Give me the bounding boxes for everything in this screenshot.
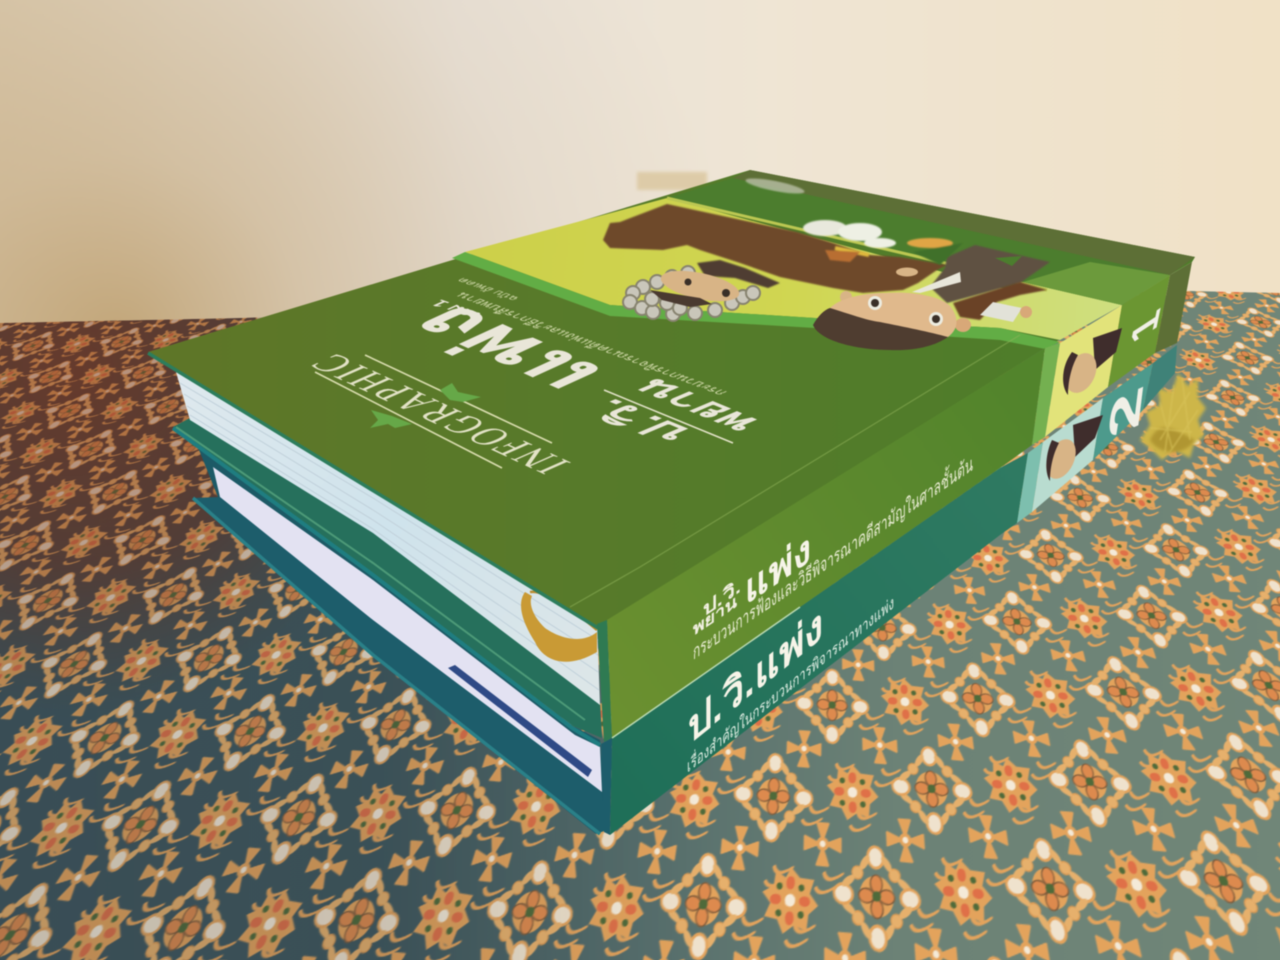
illustration: judge wig <box>623 266 760 321</box>
spine yellow panel <box>1045 305 1122 437</box>
publisher logo <box>745 175 805 197</box>
teal panel <box>1093 363 1153 460</box>
edition label on cover: ฉบับ อัพเดต <box>453 276 523 302</box>
ribbon bookmark <box>521 592 597 662</box>
title: พยาน on cover: พยาน <box>619 374 771 437</box>
cloth lighting overlays <box>0 290 1280 960</box>
cover artwork: light green chevron strip <box>452 252 1060 349</box>
illustration: judge hair <box>697 260 780 288</box>
illustration: lawyer head <box>813 293 971 350</box>
illustration: judge face <box>650 265 742 307</box>
illustration: papers on the bench <box>803 220 963 265</box>
dark teal end <box>1143 345 1177 410</box>
lower book: page block <box>213 467 602 792</box>
spine subtitle: กระบวนการฟ้องและวิธีพิจารณาคดีสามัญในศาลชั้นต้น <box>693 448 973 665</box>
spine number 2: 2 <box>1099 379 1153 446</box>
cover artwork: dark olive edge band <box>733 170 1195 275</box>
spine light green strip <box>1032 343 1060 445</box>
title: ป.วิ. on cover: ป.วิ. <box>576 394 704 447</box>
upper book: page block <box>176 372 600 705</box>
spine character icon <box>1059 328 1122 398</box>
spine title: ป.วิ.: ป.วิ. <box>703 575 741 622</box>
illustration: lawyer body <box>953 282 1047 320</box>
spine dark end panel <box>1155 262 1192 353</box>
spine title: พยาน: พยาน <box>693 591 737 640</box>
cover artwork: yellow band <box>465 198 1122 340</box>
spine character icon <box>1040 415 1103 484</box>
tablecloth floral pattern <box>0 290 1280 960</box>
title: แพ่ง on cover: แพ่ง <box>389 296 624 402</box>
illustration: lawyer robe panel <box>930 245 1050 303</box>
mint strip <box>1017 442 1043 523</box>
illustration: court bench <box>603 204 947 293</box>
spine title: ป.วิ.แพ่ง: ป.วิ.แพ่ง <box>688 597 823 755</box>
mint panel <box>1032 398 1103 512</box>
cover edge trim <box>148 353 598 628</box>
spine subtitle: เรื่องสำคัญในกระบวนการพิจารณาทางแพ่ง <box>687 590 894 777</box>
upper book: front cover <box>148 170 1195 628</box>
lower book: front cover flap <box>173 418 602 745</box>
volume label on cover: เล่ม 1 <box>426 298 486 320</box>
tassel bookmark <box>1140 373 1206 460</box>
upper book: spine <box>597 262 1192 742</box>
cover artwork: top green band <box>667 178 1170 305</box>
illustration: lawyer white tie <box>912 272 961 293</box>
lower book: dark backing between layers <box>195 440 607 830</box>
lower book: spine <box>601 345 1177 835</box>
INFOGRAPHIC label with rules and stars: INFOGRAPHIC <box>299 349 581 479</box>
illustration: lawyer paper and hand <box>840 291 1032 322</box>
spine number 1: 1 <box>1122 301 1169 352</box>
subtitle on cover: กระบวนการพิจารณาคดีแพ่งและวิธีการสืบพยาน <box>451 291 732 397</box>
wall background <box>0 0 1280 323</box>
spine title: แพ่ง: แพ่ง <box>745 525 811 614</box>
cover hinge highlight <box>570 335 1020 607</box>
lower book: rear cover <box>193 497 607 834</box>
spine green panel <box>1108 275 1170 387</box>
